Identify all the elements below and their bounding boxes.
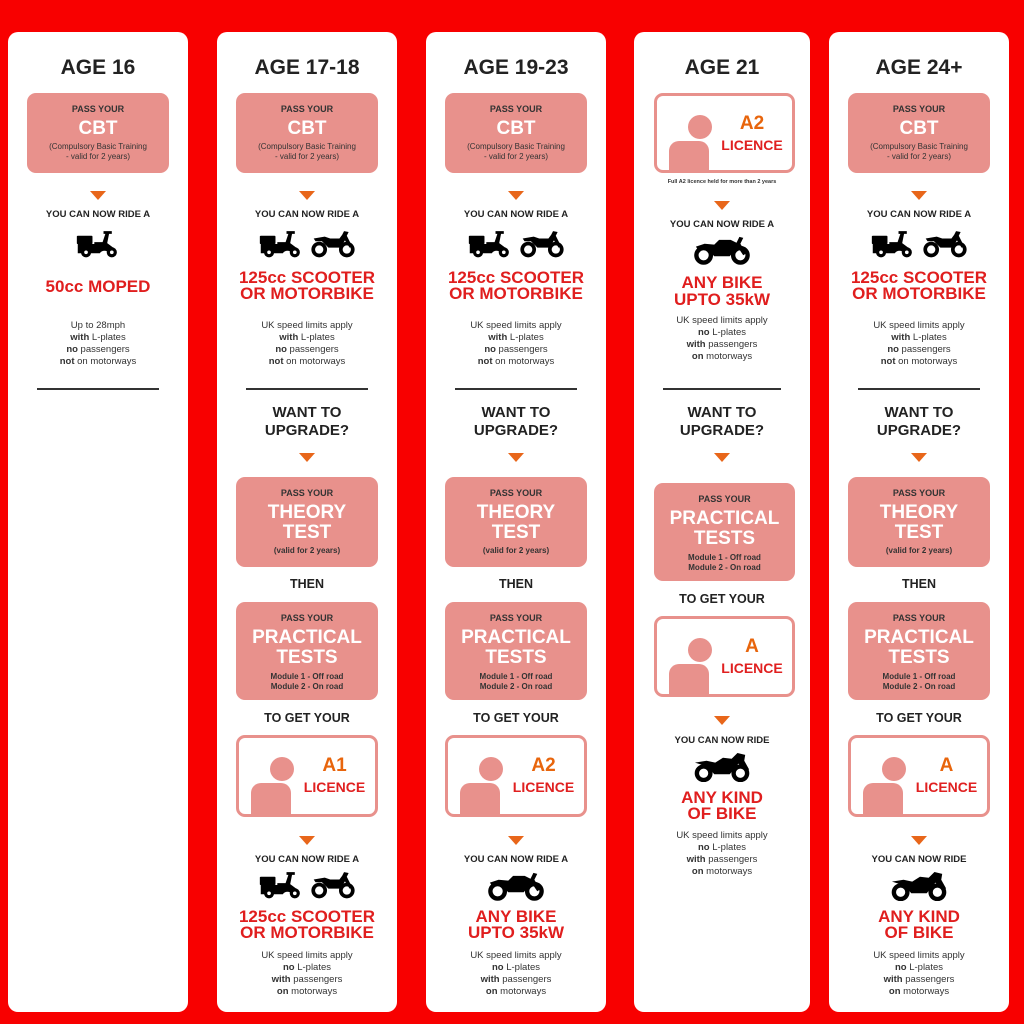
text: to get your: TO GET YOUR [679,592,765,606]
info text: no passengers [66,344,130,355]
info text: with passengers [687,339,757,350]
heading: want to upgrade: UPGRADE? [265,422,349,439]
text: you can now ride: YOU CAN NOW RIDE A [255,209,359,220]
icons: scooter and motorbike [260,872,355,898]
box: practical tests: PRACTICAL [864,627,974,648]
box: pass CBT: PASS YOUR [490,104,542,114]
info text: no L-plates [895,962,943,973]
note: Full A2 licence held for more than 2 years [668,179,776,185]
licence card: A: A [745,636,759,657]
heading: want to upgrade: UPGRADE? [877,422,961,439]
heading: 125cc [851,268,987,303]
arrow [90,191,106,200]
info text: with passengers [481,974,551,985]
icons: scooter and motorbike [468,231,564,258]
text: to get your: TO GET YOUR [473,711,559,725]
licence card: A: A [940,755,953,776]
text: to get your: TO GET YOUR [876,711,962,725]
heading: any bike: UPTO 35kW [674,290,770,309]
box: practical tests: TESTS [485,647,547,668]
heading: any kind of bike [681,788,763,823]
box: theory test: TEST [283,522,331,543]
licence card: A [654,616,795,697]
heading: any bike [674,273,770,309]
box: pass CBT: CBT [899,118,939,139]
info text: no L-plates [283,962,331,973]
info text: no passengers [275,344,339,355]
heading: age 16: AGE 16 [61,56,135,79]
box: practical tests: TESTS [694,528,755,549]
box: practical tests: PRACTICAL [670,508,779,529]
heading: 125cc: 125cc SCOOTER [448,268,584,287]
box: practical tests: Module 2 - On road [271,682,343,691]
heading: any kind of bike: ANY KIND [878,907,960,926]
text: you can now ride: YOU CAN NOW RIDE A [464,209,568,220]
info text: not on motorways [60,356,136,367]
heading: any kind of bike [878,907,960,942]
heading: 125cc: 125cc SCOOTER [851,268,987,287]
text: you can now ride: YOU CAN NOW RIDE A [46,209,150,220]
heading: want to upgrade [474,404,558,439]
box: pass CBT: - valid for 2 years) [66,152,130,161]
heading: 125cc: 125cc SCOOTER [239,907,375,926]
heading: want to upgrade [265,404,349,439]
licence card: A [848,735,990,817]
heading: age 17-18: AGE 17-18 [254,56,360,79]
arrow [508,191,524,200]
arrow [911,836,927,845]
box: theory test: (valid for 2 years) [483,546,549,555]
arrow [911,453,927,462]
box: practical tests: Module 1 - Off road [688,553,761,562]
heading: want to upgrade [680,404,764,439]
text: then: THEN [290,577,324,591]
heading: want to upgrade: UPGRADE? [474,422,558,439]
panel: age 17-18 [217,32,397,1012]
box: pass CBT: PASS YOUR [893,104,945,114]
box: practical tests: PRACTICAL [252,627,362,648]
heading: any bike [468,907,564,942]
box: theory test: THEORY [880,502,958,523]
box: pass CBT: PASS YOUR [72,104,124,114]
arrow [714,716,730,725]
box: theory test: THEORY [268,502,346,523]
box: practical tests [654,483,795,581]
licence card: A: LICENCE [916,779,977,795]
licence card: A2 [445,735,587,817]
box: pass CBT: - valid for 2 years) [275,152,339,161]
box: theory test [445,477,587,567]
info text [470,950,562,997]
info text: with L-plates [279,332,335,343]
info text: no L-plates [698,842,746,853]
heading: any kind of bike: OF BIKE [885,923,953,942]
box: pass CBT [236,93,378,173]
licence card: A1: A1 [322,755,347,776]
heading: any bike: ANY BIKE [682,273,762,292]
arrow [911,191,927,200]
heading: age 19-23: AGE 19-23 [463,56,569,79]
info text: no passengers [887,344,951,355]
text: you can now ride: YOU CAN NOW RIDE [674,735,770,746]
box: practical tests: Module 2 - On road [883,682,955,691]
info text: Up to 28mph [71,320,125,331]
heading: any kind of bike: OF BIKE [688,804,756,823]
box: pass CBT: CBT [287,118,327,139]
arrow [508,836,524,845]
heading: 125cc: OR MOTORBIKE [240,923,374,942]
box: practical tests [445,602,587,700]
arrow [714,201,730,210]
box: pass CBT [445,93,587,173]
icons: scooter and motorbike [872,231,967,258]
heading: 125cc: 125cc SCOOTER [239,268,375,287]
box: practical tests: Module 2 - On road [480,682,552,691]
panel: age 16 [8,32,188,1012]
box: practical tests: TESTS [888,647,950,668]
heading: age 24+: AGE 24+ [876,56,962,79]
box: practical tests: Module 1 - Off road [271,672,343,681]
icon: cruiser bike [488,872,544,901]
info text: on motorways [692,866,752,877]
heading: want to upgrade: WANT TO [482,404,550,421]
text: you can now ride: YOU CAN NOW RIDE A [464,854,568,865]
heading: any bike: UPTO 35kW [468,923,564,942]
arrow [299,191,315,200]
box: pass CBT: - valid for 2 years) [484,152,548,161]
info text [470,320,562,367]
box: pass CBT [848,93,990,173]
text: then: THEN [902,577,936,591]
icon: scooter [76,231,117,258]
info text: UK speed limits apply [261,320,353,331]
heading: 125cc [239,268,375,303]
heading: age 21: AGE 21 [685,56,759,79]
arrow [299,836,315,845]
info text: no L-plates [698,327,746,338]
box: pass CBT: - valid for 2 years) [887,152,951,161]
box: theory test: PASS YOUR [490,488,542,498]
box: theory test [848,477,990,567]
box: practical tests: TESTS [276,647,338,668]
info text: no L-plates [492,962,540,973]
info text: with L-plates [891,332,947,343]
box: pass CBT: (Compulsory Basic Training [258,142,356,151]
licence card: A2: LICENCE [721,137,783,153]
icon: sport bike [892,872,946,901]
heading: 125cc: OR MOTORBIKE [852,284,986,303]
licence card: A2: A2 [740,113,764,134]
box: practical tests: Module 2 - On road [688,563,761,572]
licence card: A: LICENCE [721,660,783,676]
info text [873,320,965,367]
panel: age 21 [634,32,810,1012]
arrow [714,453,730,462]
box: theory test: PASS YOUR [893,488,945,498]
licence card: A2 [654,93,795,173]
info text: UK speed limits apply [676,315,768,326]
box: pass CBT: PASS YOUR [281,104,333,114]
panel: age 24+ [829,32,1009,1012]
heading: 125cc [448,268,584,303]
arrow [508,453,524,462]
heading: 125cc: OR MOTORBIKE [449,284,583,303]
info text: with L-plates [488,332,544,343]
box: theory test: PASS YOUR [281,488,333,498]
arrow [299,453,315,462]
licence card: A2: LICENCE [513,779,574,795]
info text: on motorways [486,986,546,997]
info text [60,320,136,367]
box: practical tests [848,602,990,700]
info text: with passengers [687,854,757,865]
info text: UK speed limits apply [873,950,965,961]
text: you can now ride: YOU CAN NOW RIDE A [867,209,971,220]
info text: UK speed limits apply [873,320,965,331]
info text [676,315,768,362]
box: theory test: THEORY [477,502,555,523]
heading: 50cc moped: 50cc MOPED [46,277,150,296]
info text: not on motorways [881,356,957,367]
info text [873,950,965,997]
box: practical tests: PASS YOUR [490,613,542,623]
info text [676,830,768,877]
heading: want to upgrade: WANT TO [273,404,341,421]
box: pass CBT [27,93,169,173]
box: pass CBT: CBT [496,118,536,139]
text: you can now ride: YOU CAN NOW RIDE A [255,854,359,865]
heading: want to upgrade: UPGRADE? [680,422,764,439]
info text: on motorways [692,351,752,362]
info text: UK speed limits apply [470,950,562,961]
info text: not on motorways [269,356,345,367]
heading: 125cc: OR MOTORBIKE [240,284,374,303]
icon: cruiser bike [694,236,750,265]
heading: 125cc [239,907,375,942]
box: practical tests: PRACTICAL [461,627,571,648]
text: to get your: TO GET YOUR [264,711,350,725]
box: pass CBT: (Compulsory Basic Training [467,142,565,151]
box: pass CBT: CBT [78,118,118,139]
icons: scooter and motorbike [260,231,355,258]
text: you can now ride: YOU CAN NOW RIDE A [670,219,774,230]
licence card: A1: LICENCE [304,779,365,795]
box: theory test: (valid for 2 years) [274,546,340,555]
heading: any bike: ANY BIKE [476,907,556,926]
info text: on motorways [277,986,337,997]
heading: any kind of bike: ANY KIND [681,788,763,807]
box: theory test: (valid for 2 years) [886,546,952,555]
info text [261,320,353,367]
text: you can now ride: YOU CAN NOW RIDE [872,854,966,865]
info text: UK speed limits apply [676,830,768,841]
licence card: A2: A2 [531,755,556,776]
box: practical tests: Module 1 - Off road [883,672,955,681]
info text: with passengers [272,974,342,985]
info text: UK speed limits apply [261,950,353,961]
licence card: A1 [236,735,378,817]
info text: with passengers [884,974,954,985]
box: practical tests: PASS YOUR [281,613,333,623]
info text: on motorways [889,986,949,997]
info text: with L-plates [70,332,126,343]
box: practical tests: Module 1 - Off road [480,672,552,681]
heading: want to upgrade: WANT TO [688,404,756,421]
info text: not on motorways [478,356,554,367]
info text [261,950,353,997]
box: pass CBT: (Compulsory Basic Training [49,142,147,151]
box: pass CBT: (Compulsory Basic Training [870,142,968,151]
box: theory test [236,477,378,567]
heading: want to upgrade: WANT TO [885,404,953,421]
heading: want to upgrade [877,404,961,439]
icon: sport bike [694,753,750,782]
info text: no passengers [484,344,548,355]
box: practical tests [236,602,378,700]
text: then: THEN [499,577,533,591]
box: practical tests: PASS YOUR [893,613,945,623]
box: theory test: TEST [492,522,540,543]
box: practical tests: PASS YOUR [698,494,751,504]
box: theory test: TEST [895,522,943,543]
info text: UK speed limits apply [470,320,562,331]
panel: age 19-23 [426,32,606,1012]
